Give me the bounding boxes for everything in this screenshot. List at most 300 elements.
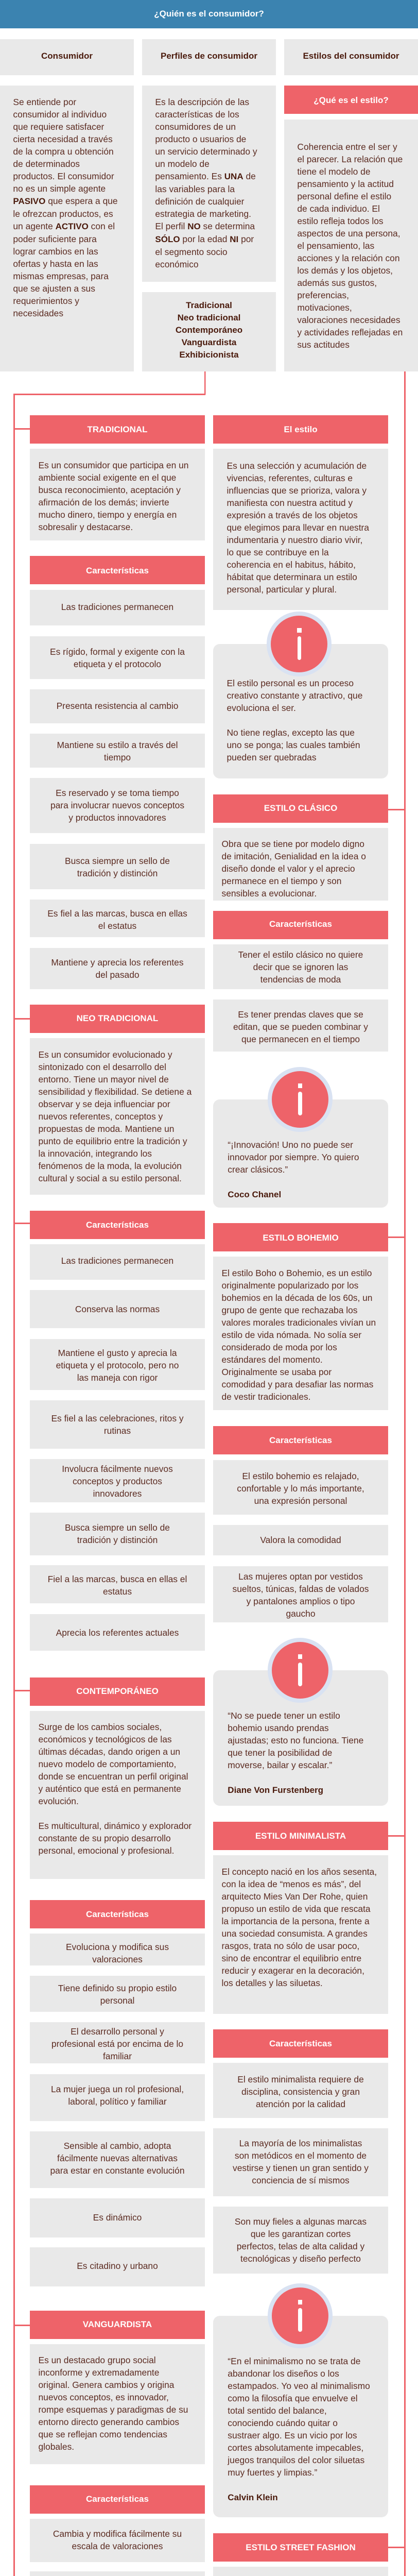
callout: Calvin Klein quote: juegos tranquilos del color siluetas <box>228 2455 364 2465</box>
callout: Diane Von Furstenberg quote: que tener la posibilidad de <box>228 1748 332 1758</box>
panel: consumidor definition: cierta necesidad a través <box>13 134 113 144</box>
item: La mayoría de los minimalistas <box>239 2138 362 2148</box>
heading: ESTILO CLÁSICO: ESTILO CLÁSICO <box>264 803 337 813</box>
panel: minimalista text: propuso un estilo de vida que rescata <box>221 1904 371 1914</box>
icon: info <box>267 612 332 676</box>
callout: estilo personal: evoluciona el ser. <box>227 703 296 713</box>
panel: tradicional text: busca reconocimiento, aceptación y <box>38 484 181 495</box>
panel: bohemio text: bohemios en la década de los 60s, un <box>221 1293 372 1303</box>
item: Busca siempre un sello de <box>65 855 170 866</box>
panel: contemporáneo text: evolución. <box>38 1796 79 1806</box>
panel: estilo definition: sus actitudes <box>297 339 350 349</box>
panel: consumidor definition: ofertas y hasta en las <box>13 259 98 269</box>
panel: perfil definition: características de los <box>155 109 239 120</box>
item <box>30 1400 205 1449</box>
item <box>213 1525 388 1555</box>
item: fácilmente nuevas alternativas <box>57 2153 178 2163</box>
item: El estilo minimalista requiere de <box>237 2074 364 2084</box>
item <box>30 2074 205 2121</box>
panel: neo tradicional text: observar y se deja influenciar por <box>38 1099 170 1109</box>
item: sueltos, túnicas, faldas de volados <box>233 1584 369 1594</box>
callout: Diane Von Furstenberg quote: Diane Von Furstenberg <box>228 1785 323 1795</box>
panel: el estilo text: personal, particular y plural. <box>227 584 337 595</box>
panel: clásico text: de imitación, Genialidad en la idea o <box>221 851 366 861</box>
panel: tradicional text: sobresalir y destacarse. <box>38 521 133 532</box>
panel: el estilo text: influencias que se prioriza, valora y <box>227 485 367 496</box>
panel: neo tradicional text: fenómenos de la moda, la evolución <box>38 1161 182 1171</box>
panel: clásico text: sensibles a evolucionar. <box>221 888 317 899</box>
panel: perfil definition: producto o usuarios de <box>155 134 246 144</box>
panel: bohemio text: estándares del momento. <box>221 1354 323 1365</box>
item <box>213 1566 388 1622</box>
panel: perfil definition: las variables para la <box>155 184 235 194</box>
callout: Coco Chanel quote: innovador por siempre. Yo quiero <box>228 1152 359 1162</box>
heading: Características minimalista <box>213 2029 388 2058</box>
panel: consumidor definition: que requiere satisfacer <box>13 122 104 132</box>
callout: estilo personal: creativo constante y atractivo, que <box>227 690 362 701</box>
panel: neo tradicional text: Es un consumidor evolucionado y <box>38 1049 172 1060</box>
callout: Diane Von Furstenberg quote: “No se puede tener un estilo <box>228 1710 340 1721</box>
panel: bohemio text: Originalmente se usaba por <box>221 1367 332 1377</box>
panel: consumidor definition: PASIVO que espera a que <box>13 196 118 206</box>
heading: Características bohemio <box>213 1426 388 1454</box>
panel: vanguardista text: que se reflejan como tendencias <box>38 2429 167 2439</box>
panel: consumidor definition: de la compra u obtención <box>13 146 114 157</box>
heading: ESTILO STREET FASHION <box>213 2533 388 2562</box>
heading: ESTILO STREET FASHION: ESTILO STREET FASHION <box>246 2543 356 2552</box>
item: La mujer juega un rol profesional, <box>51 2084 184 2094</box>
item: laboral, político y familiar <box>68 2096 167 2107</box>
panel: estilo definition: personal define el estilo <box>297 191 391 201</box>
item: tradición y distinción <box>77 1535 158 1545</box>
item: Las tradiciones permanecen <box>61 602 173 612</box>
item: el estatus <box>98 921 136 931</box>
heading: VANGUARDISTA <box>30 2310 205 2339</box>
title banner <box>0 0 418 28</box>
item <box>30 844 205 889</box>
panel: bohemio text <box>213 1256 388 1410</box>
heading: TRADICIONAL <box>30 415 205 443</box>
heading: ESTILO CLÁSICO <box>213 794 388 822</box>
callout: Calvin Klein quote: abandonar los diseños o los <box>228 2368 339 2379</box>
item: Las tradiciones permanecen <box>61 1255 173 1265</box>
item <box>30 589 205 625</box>
item: Es dinámico <box>93 2212 142 2223</box>
item: disciplina, consistencia y gran <box>241 2087 360 2097</box>
panel: neo tradicional text: entorno. Tiene un mayor nivel de <box>38 1074 169 1084</box>
panel: estilo definition: valoraciones necesidades <box>297 314 400 325</box>
callout: Diane Von Furstenberg quote: ajustadas; esto no funciona. Tiene <box>228 1735 363 1745</box>
panel: consumidor definition: de determinados <box>13 159 80 169</box>
heading: NEO TRADICIONAL: NEO TRADICIONAL <box>77 1013 158 1023</box>
callout: Calvin Klein quote <box>213 2316 388 2517</box>
heading: Perfiles de consumidor <box>142 39 276 75</box>
item <box>213 2128 388 2196</box>
item: para estar en constante evolución <box>50 2165 185 2176</box>
item: etiqueta y el protocolo <box>74 659 161 669</box>
item: atención por la calidad <box>256 2099 345 2109</box>
panel: estilo definition: de cada individuo. El <box>297 203 380 213</box>
item: Es citadino y urbano <box>77 2261 158 2271</box>
item: Es tener prendas claves que se <box>238 1009 363 1019</box>
panel: estilo definition: Coherencia entre el ser y <box>297 141 397 151</box>
panel: consumidor definition: mismas empresas, para <box>13 271 109 281</box>
panel: minimalista text: arquitecto Mies Van Der Rohe, quien <box>221 1891 368 1902</box>
heading: Características neo tradicional <box>30 1211 205 1239</box>
item <box>30 689 205 723</box>
panel: minimalista text: El concepto nació en los años sesenta, <box>221 1867 377 1877</box>
item <box>30 2022 205 2063</box>
panel: tradicional text: afirmación de los demás; invierte <box>38 497 169 507</box>
item <box>30 1338 205 1390</box>
panel: minimalista text: rasgos, trata no sólo de usar poco, <box>221 1941 359 1951</box>
heading: ESTILO BOHEMIO: ESTILO BOHEMIO <box>263 1233 339 1243</box>
icon: info <box>268 1638 333 1703</box>
callout: Calvin Klein quote: Calvin Klein <box>228 2493 278 2502</box>
item: para involucrar nuevos conceptos <box>50 800 184 810</box>
item <box>30 1614 205 1651</box>
callout: Calvin Klein quote: como la filosofía que envuelve el <box>228 2393 358 2403</box>
item: profesional está por encima de lo <box>51 2039 183 2049</box>
item: familiar <box>103 2051 132 2061</box>
panel: contemporáneo text: económicos y tecnológicos de las <box>38 1734 172 1744</box>
panel: contemporáneo text: constante de su propio desarrollo <box>38 1833 171 1843</box>
callout: Calvin Klein quote: “En el minimalismo no se trata de <box>228 2356 360 2366</box>
heading: Características contemporáneo: Características <box>86 1909 149 1919</box>
item: y productos innovadores <box>68 812 166 822</box>
panel: tradicional text: Es un consumidor que participa en un <box>38 460 188 470</box>
panel: neo tradicional text <box>30 1038 205 1194</box>
panel: minimalista text: con la idea de “menos es más”, del <box>221 1879 361 1889</box>
item <box>30 2198 205 2237</box>
item <box>30 1290 205 1328</box>
panel: bohemio text: estilo de vida nómada. No solía ser <box>221 1330 361 1340</box>
item: Sensible al cambio, adopta <box>64 2141 171 2151</box>
panel: consumidor definition: que se ajusten a sus <box>13 283 95 294</box>
item: Aprecia los referentes actuales <box>56 1628 179 1638</box>
item <box>30 2518 205 2562</box>
panel: perfil definition: el segmento socio <box>155 247 228 257</box>
panel: neo tradicional text: punto de equilibrio entre la tradición y <box>38 1136 187 1146</box>
item: etiqueta y el protocolo, pero no <box>56 1360 179 1370</box>
item: vestirse y tienen un gran sentido y <box>233 2163 369 2173</box>
item <box>30 1933 205 1965</box>
panel: profile list: Neo tradicional <box>178 313 240 323</box>
item: rutinas <box>104 1426 131 1436</box>
item <box>30 948 205 989</box>
panel: clásico text: Obra que se tiene por modelo digno <box>221 839 364 849</box>
callout: Diane Von Furstenberg quote <box>213 1670 388 1806</box>
item <box>30 734 205 768</box>
icon: info <box>268 2283 333 2348</box>
panel: bohemio text: de vestir tradicionales. <box>221 1392 311 1402</box>
item: Valora la comodidad <box>260 1535 341 1545</box>
panel: estilo definition: estilo refleja todos los <box>297 215 384 226</box>
panel: minimalista text: la importancia de la persona, frente a <box>221 1916 370 1926</box>
panel: profile list: Contemporáneo <box>176 325 242 335</box>
panel: minimalista text <box>213 1855 388 2014</box>
heading: El estilo <box>213 415 388 443</box>
heading: Características bohemio: Características <box>269 1435 332 1445</box>
heading: VANGUARDISTA: VANGUARDISTA <box>83 2319 152 2329</box>
panel: vanguardista text: rompe esquemas y paradigmas de su <box>38 2404 188 2415</box>
panel: profile list <box>142 292 276 371</box>
item: Mantiene y aprecia los referentes <box>51 957 184 968</box>
panel: el estilo text: lo que se contribuye en la <box>227 547 329 557</box>
heading: El estilo: El estilo <box>284 425 318 434</box>
panel: perfil definition: un modelo de <box>155 159 210 169</box>
panel: el estilo text: indumentaria y nuestro diario vivir, <box>227 535 362 545</box>
heading: Características neo tradicional: Características <box>86 1220 149 1230</box>
panel: bohemio text: considerado de moda por los <box>221 1342 337 1352</box>
panel: neo tradicional text: la innovación, integrando los <box>38 1148 152 1159</box>
item: valoraciones <box>92 1954 143 1964</box>
callout: Diane Von Furstenberg quote: moverse, bailar y escalar.” <box>228 1760 332 1770</box>
panel: vanguardista text: original. Genera cambios y origina <box>38 2380 174 2390</box>
panel: estilo definition: los demás y los objetos, <box>297 265 393 275</box>
panel: el estilo text: que elegimos para llevar en nuestra <box>227 522 369 533</box>
item: Presenta resistencia al cambio <box>57 701 178 711</box>
item: Mantiene el gusto y aprecia la <box>58 1348 177 1358</box>
item: confortable y lo más importante, <box>237 1483 364 1494</box>
heading: TRADICIONAL: TRADICIONAL <box>87 425 148 434</box>
item <box>30 1459 205 1502</box>
panel: vanguardista text: inconforme y extremadamente <box>38 2367 159 2378</box>
callout: Diane Von Furstenberg quote: bohemio usando prendas <box>228 1723 329 1733</box>
panel: perfil definition: Es la descripción de las <box>155 97 249 107</box>
item: del pasado <box>95 970 140 980</box>
panel: contemporáneo text: personal, emocional y profesional. <box>38 1845 174 1856</box>
panel: consumidor definition: requerimientos y <box>13 296 79 306</box>
heading: Características clásico: Características <box>269 919 332 929</box>
panel: consumidor definition: consumidor al individuo <box>13 109 107 120</box>
panel: vanguardista text <box>30 2344 205 2464</box>
panel: el estilo text: expresión a través de los objetos <box>227 510 358 520</box>
item: Es reservado y se toma tiempo <box>56 787 179 798</box>
panel: bohemio text: originalmente popularizado por los <box>221 1280 358 1291</box>
item <box>213 944 388 989</box>
panel: perfil definition: consumidores de un <box>155 122 236 132</box>
item: gaucho <box>286 1608 316 1619</box>
item: tiempo <box>104 752 131 762</box>
callout: Calvin Klein quote: conociendo cuándo quitar o <box>228 2418 338 2428</box>
heading: NEO TRADICIONAL <box>30 1005 205 1032</box>
item: tendencias de moda <box>260 974 341 985</box>
item <box>30 2571 205 2576</box>
panel: minimalista text: reducir y exagerar en la decoración, <box>221 1965 364 1976</box>
item: innovadores <box>93 1488 142 1499</box>
panel: contemporáneo text: y auténtico que está en permanente <box>38 1784 181 1794</box>
item <box>30 2131 205 2188</box>
panel: minimalista text: una sociedad consumista. A grandes <box>221 1928 368 1939</box>
callout: Coco Chanel quote <box>213 1099 388 1208</box>
title banner: ¿Quién es el consumidor? <box>154 9 264 19</box>
panel: contemporáneo text: nuevo modelo de comportamiento, <box>38 1759 176 1769</box>
panel: clásico text <box>213 827 388 901</box>
panel: estilo definition: preferencias, <box>297 290 349 300</box>
panel: minimalista text: sino de encontrar el equilibrio entre <box>221 1953 361 1963</box>
item <box>213 1460 388 1515</box>
callout: estilo personal <box>213 644 388 778</box>
heading: ¿Qué es el estilo? <box>284 86 418 114</box>
panel: perfil definition <box>142 86 276 281</box>
item: Las mujeres optan por vestidos <box>238 1571 363 1582</box>
panel: clásico text: diseño donde el valor y el aprecio <box>221 863 355 874</box>
heading: Consumidor: Consumidor <box>41 50 93 61</box>
panel: contemporáneo text: Es multicultural, dinámico y explorador <box>38 1821 191 1831</box>
item: son metódicos en el momento de <box>235 2150 367 2161</box>
item: conciencia de sí mismos <box>252 2175 350 2185</box>
heading: Características tradicional: Características <box>86 566 149 575</box>
item: conceptos y productos <box>73 1476 162 1486</box>
panel: el estilo text <box>213 448 388 610</box>
item: Mantiene su estilo a través del <box>57 740 178 750</box>
item: Tener el estilo clásico no quiere <box>238 950 363 960</box>
item: que les garantizan cortes <box>251 2229 351 2239</box>
callout: Calvin Klein quote: total sentido del balance, <box>228 2405 327 2416</box>
item: escala de valoraciones <box>72 2541 163 2551</box>
item: Conserva las normas <box>75 1304 160 1314</box>
panel: perfil definition: económico <box>155 259 199 269</box>
panel: estilo definition: aspectos de una persona, <box>297 228 400 238</box>
panel: bohemio text: comodidad y para desafiar las normas <box>221 1379 373 1389</box>
panel: street fashion text <box>213 2567 388 2576</box>
heading: Consumidor <box>0 39 134 75</box>
heading: Características clásico <box>213 911 388 939</box>
panel: perfil definition: un servicio determinado y <box>155 146 257 157</box>
callout: estilo personal: El estilo personal es un proceso <box>227 678 354 688</box>
heading: ESTILO MINIMALISTA <box>213 1822 388 1850</box>
heading: CONTEMPORÁNEO <box>30 1677 205 1705</box>
item <box>30 1975 205 2011</box>
panel: consumidor definition: necesidades <box>13 308 63 318</box>
callout: estilo personal: pueden ser quebradas <box>227 752 317 762</box>
panel: vanguardista text: Es un destacado grupo social <box>38 2355 156 2365</box>
heading: ¿Qué es el estilo?: ¿Qué es el estilo? <box>314 95 389 105</box>
callout: Calvin Klein quote: cortes absolutamente impecables, <box>228 2443 363 2453</box>
panel: bohemio text: grupo de gente que rechazaba los <box>221 1305 357 1315</box>
panel: el estilo text: manifiesta con nuestra actitud y <box>227 498 353 508</box>
panel: contemporáneo text: últimas décadas, dando origen a un <box>38 1747 180 1757</box>
item: personal <box>100 1995 134 2005</box>
heading: Características contemporáneo <box>30 1900 205 1928</box>
panel: estilo definition: el parecer. La relación que <box>297 154 403 164</box>
callout: Calvin Klein quote: muy fuertes y limpias.” <box>228 2467 317 2478</box>
panel: bohemio text: El estilo Boho o Bohemio, es un estilo <box>221 1268 372 1278</box>
item: una expresión personal <box>254 1496 347 1506</box>
item <box>213 999 388 1052</box>
item: Es rígido, formal y exigente con la <box>50 647 185 657</box>
item: Evoluciona y modifica sus <box>66 1942 169 1952</box>
panel: consumidor definition: Se entiende por <box>13 97 76 107</box>
panel: estilo definition: el pensamiento, las <box>297 240 374 250</box>
panel: consumidor definition: un agente ACTIVO con el <box>13 221 115 231</box>
callout: Coco Chanel quote: crear clásicos.” <box>228 1164 288 1175</box>
panel: neo tradicional text: cultural y social a su estilo personal. <box>38 1173 182 1183</box>
panel: neo tradicional text: sensibilidad y flexibilidad. Se detiene a <box>38 1087 191 1097</box>
panel: contemporáneo text: Surge de los cambios sociales, <box>38 1722 162 1732</box>
panel: perfil definition: El perfil NO se determina <box>155 221 255 231</box>
item <box>30 1513 205 1555</box>
item <box>30 778 205 833</box>
panel: vanguardista text: nuevos conceptos, es innovador, <box>38 2392 169 2402</box>
item: Es fiel a las celebraciones, ritos y <box>51 1413 184 1423</box>
panel: tradicional text: mucho dinero, tiempo y energía en <box>38 509 177 519</box>
panel: estilo definition: además sus gustos, <box>297 277 377 287</box>
panel: el estilo text: Es una selección y acumulación de <box>227 461 367 471</box>
panel: minimalista text: los detalles y las siluetas. <box>221 1978 323 1988</box>
panel: consumidor definition: no es un simple agente <box>13 183 106 194</box>
panel: tradicional text <box>30 448 205 540</box>
item <box>30 900 205 937</box>
panel: consumidor definition: poder suficiente para <box>13 234 97 244</box>
panel: estilo definition: tiene el modelo de <box>297 166 371 176</box>
panel: clásico text: permanece en el tiempo y son <box>221 876 341 886</box>
panel: estilo definition <box>284 120 418 371</box>
panel: estilo definition: pensamiento y la actitud <box>297 178 394 189</box>
panel: perfil definition: definición de cualquier <box>155 196 244 207</box>
panel: neo tradicional text: nuevos referentes, conceptos y <box>38 1111 163 1122</box>
heading: Características vanguardista <box>30 2485 205 2513</box>
heading: CONTEMPORÁNEO: CONTEMPORÁNEO <box>76 1686 159 1696</box>
panel: consumidor definition <box>0 86 134 371</box>
panel: neo tradicional text: sintonizado con el desarrollo del <box>38 1062 166 1072</box>
item <box>213 2207 388 2273</box>
panel: perfil definition: SÓLO por la edad NI por <box>155 234 254 244</box>
panel: consumidor definition: productos. El consumidor <box>13 171 114 181</box>
panel: estilo definition: y actividades reflejadas en <box>297 327 403 337</box>
panel: perfil definition: pensamiento. Es UNA de <box>155 171 256 181</box>
item: estatus <box>103 1586 132 1597</box>
heading: ESTILO MINIMALISTA: ESTILO MINIMALISTA <box>255 1831 346 1840</box>
heading: Estilos del consumidor <box>284 39 418 75</box>
panel: el estilo text: hábitat que determinara un estilo <box>227 572 357 582</box>
item: que permanecen en el tiempo <box>241 1033 360 1044</box>
item: El estilo bohemio es relajado, <box>242 1471 359 1481</box>
panel: estilo definition: motivaciones, <box>297 302 352 312</box>
panel: tradicional text: ambiente social exigente en el que <box>38 472 176 482</box>
heading: Características tradicional <box>30 556 205 584</box>
panel: perfil definition: estrategia de marketing. <box>155 209 251 219</box>
item: decir que se ignoren las <box>253 962 348 972</box>
panel: estilo definition: acciones y la relación con <box>297 252 400 263</box>
item: Cambia y modifica fácilmente su <box>53 2529 182 2539</box>
callout: Calvin Klein quote: sustraer algo. Es un vicio por los <box>228 2430 357 2441</box>
panel: consumidor definition: le ofrezcan productos, es <box>13 209 113 219</box>
panel: neo tradicional text: propuestas de moda. Mantiene un <box>38 1124 174 1134</box>
panel: vanguardista text: entorno directo generando cambios <box>38 2417 179 2427</box>
panel: bohemio text: valores morales tradicionales vivían un <box>221 1317 376 1328</box>
item: editan, que se pueden combinar y <box>233 1021 368 1031</box>
heading: Estilos del consumidor: Estilos del consumidor <box>303 50 399 61</box>
callout: estilo personal: No tiene reglas, excepto las que <box>227 727 355 738</box>
item: El desarrollo personal y <box>71 2026 164 2037</box>
panel: contemporáneo text <box>30 1710 205 1879</box>
icon: info <box>268 1067 333 1132</box>
panel: profile list: Tradicional <box>186 300 232 310</box>
callout: estilo personal: uno se ponga; las cuales también <box>227 740 360 750</box>
item <box>30 1244 205 1280</box>
panel: vanguardista text: globales. <box>38 2442 74 2452</box>
callout: Coco Chanel quote: Coco Chanel <box>228 1190 281 1199</box>
callout: Coco Chanel quote: “¡Innovación! Uno no puede ser <box>228 1140 353 1150</box>
heading: Características minimalista: Características <box>269 2039 332 2048</box>
item <box>30 1565 205 1603</box>
item: y pantalones amplios o tipo <box>247 1596 355 1606</box>
panel: profile list: Exhibicionista <box>179 350 239 360</box>
panel: consumidor definition: lograr cambios en las <box>13 246 98 257</box>
item: Involucra fácilmente nuevos <box>62 1464 173 1474</box>
